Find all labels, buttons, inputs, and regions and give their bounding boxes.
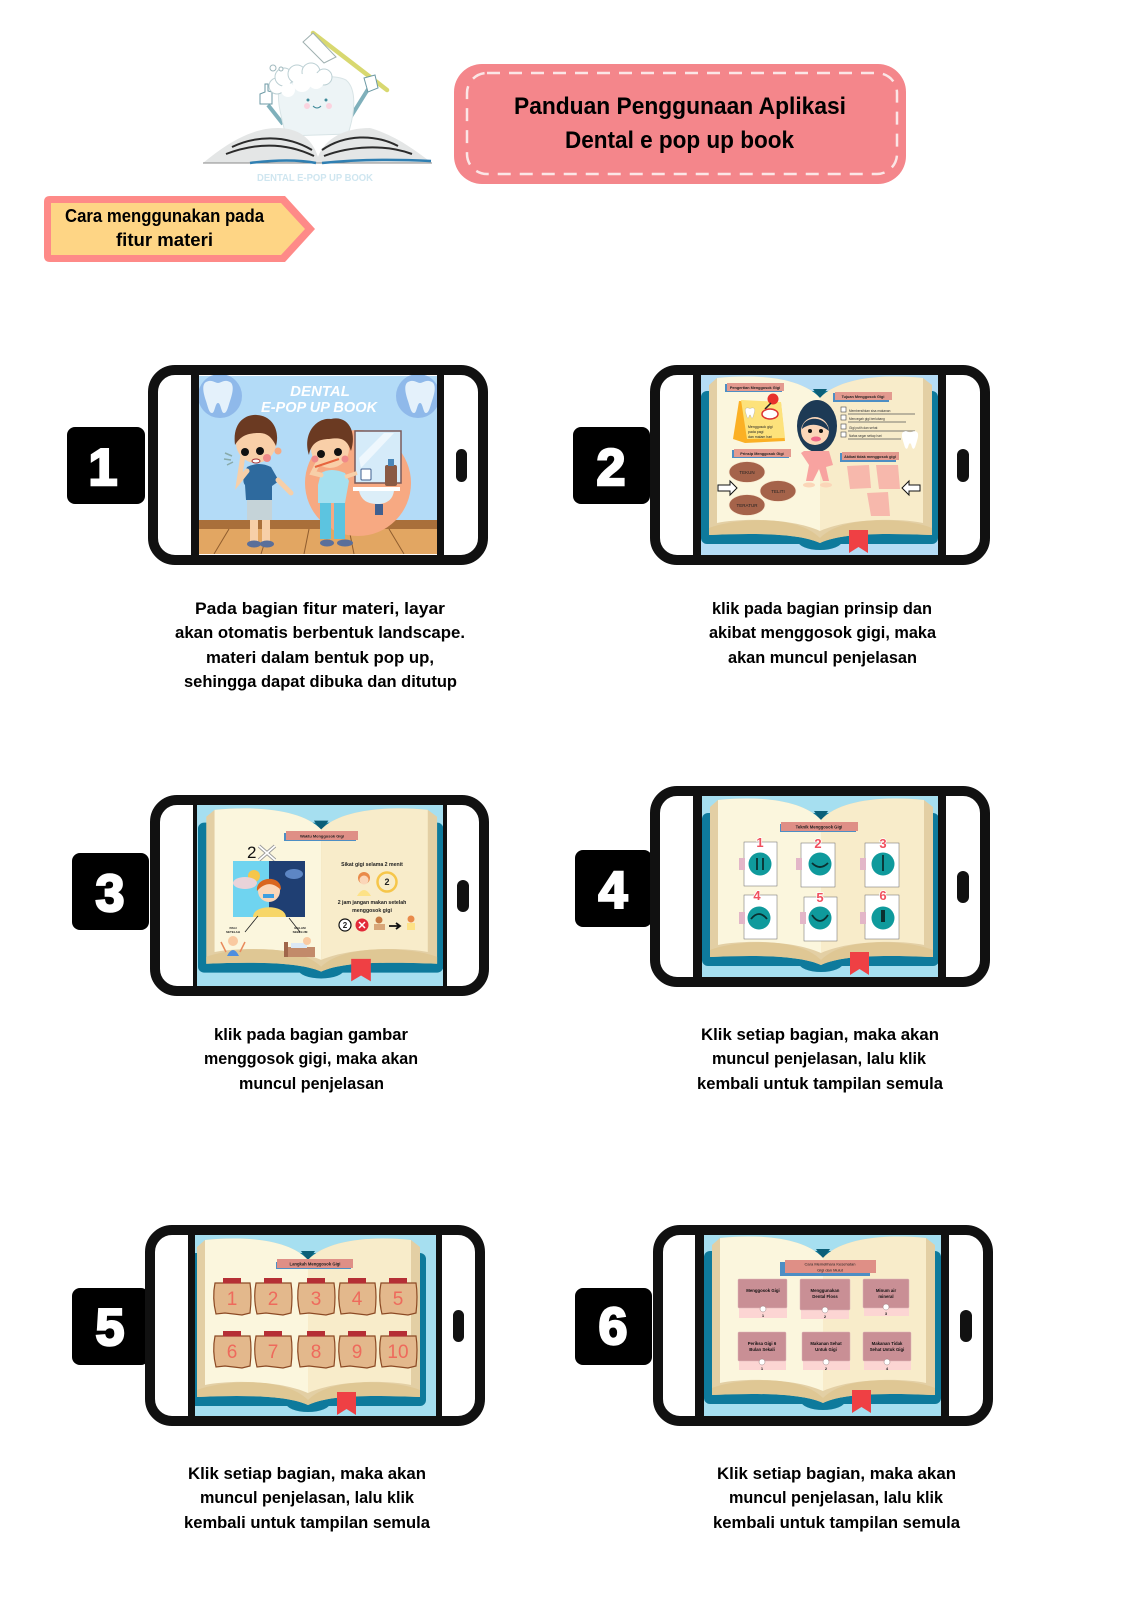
phone 6 screen: book page: mineral xyxy=(878,1294,894,1299)
ribbon text: Cara menggunakan pada xyxy=(65,206,265,226)
phone 4 screen: book page: 3 xyxy=(879,836,887,851)
caption 2: akibat menggosok gigi, maka xyxy=(709,624,937,642)
caption 1: akan otomatis berbentuk landscape. xyxy=(175,624,465,642)
phone 6 screen: book page: 4 xyxy=(886,1366,889,1371)
phone 3 screen: book page: Waktu Menggosok Gigi xyxy=(300,834,344,838)
caption 3: klik pada bagian gambar xyxy=(214,1026,409,1044)
phone 6 screen: book page: 2 xyxy=(825,1366,828,1371)
lower pink tabs xyxy=(739,1308,911,1370)
badge 2 xyxy=(573,427,650,504)
phone 2 screen: book page: Menggosok gigi xyxy=(748,425,773,429)
step 6 xyxy=(575,1225,988,1532)
phone 2 screen: book page: Mencegah gigi berlubang xyxy=(849,417,885,421)
icon: toothbrush xyxy=(303,33,387,90)
phone 2 screen: book page: dan malam hari xyxy=(748,435,772,439)
phone 6 screen: book page: Bulan Sekali xyxy=(749,1347,775,1352)
day and night brushing picture xyxy=(233,861,305,917)
phone 3 screen: book page: 2 xyxy=(247,843,256,862)
phone 2 screen: book page: Pengertian Menggosok Gigi xyxy=(730,386,780,390)
caption 5: Klik setiap bagian, maka akan xyxy=(188,1465,426,1483)
phone 2 screen: book page: Akibat tidak menggosok gigi xyxy=(844,455,896,459)
phone 3 screen: book page: SEBELUM xyxy=(293,930,308,934)
caption 5: muncul penjelasan, lalu klik xyxy=(200,1489,415,1507)
phone 2 frame xyxy=(655,365,985,565)
phone 4 screen: book page: 4 xyxy=(753,888,761,903)
ribbon text: fitur materi xyxy=(116,230,213,250)
phone 3 screen: book page xyxy=(197,805,443,986)
phone 6 screen: book page: 2 xyxy=(824,1314,827,1319)
step 5 xyxy=(72,1225,480,1532)
caption 3 xyxy=(204,1026,418,1093)
badge 3 xyxy=(72,853,149,930)
ribbon text xyxy=(65,206,265,250)
numbered folders row 1 xyxy=(214,1283,417,1315)
phone 6 screen: book page: Makanan Sehat xyxy=(810,1341,842,1346)
phone 1 screen: cover scene xyxy=(199,375,437,554)
phone 3 screen: book page: MALAM xyxy=(294,926,306,930)
phone 3 screen: book page: 2 jam jangan makan setelah xyxy=(338,900,406,906)
phone 5 screen: book page: 5 xyxy=(393,1289,403,1310)
caption 1: Pada bagian fitur materi, layar xyxy=(195,600,446,618)
phone 6 screen: book page: Untuk Gigi xyxy=(815,1347,837,1352)
phone 3 screen: book page: menggosok gigi xyxy=(352,908,392,914)
phone 6 frame xyxy=(658,1225,988,1426)
phone 6 screen: book page: Menggunakan xyxy=(811,1288,840,1293)
caption 2 xyxy=(709,600,937,667)
phone 1 frame xyxy=(153,365,483,565)
caption 4 xyxy=(697,1026,944,1093)
phone 6 screen: book page: 1 xyxy=(761,1366,764,1371)
phone 5 screen: book page: 8 xyxy=(311,1342,321,1363)
phone 6 screen: book page: Sehat Untuk Gigi xyxy=(870,1347,904,1352)
caption 3: muncul penjelasan xyxy=(239,1075,384,1093)
boy brushing teeth xyxy=(307,418,357,546)
phone 4 screen: book page: Teknik Menggosok Gigi xyxy=(796,824,842,830)
phone 2 screen: book page xyxy=(701,375,938,555)
step 1 xyxy=(67,365,483,691)
title text: Panduan Penggunaan Aplikasi xyxy=(514,93,846,120)
badge 2: 2 xyxy=(597,439,625,497)
phone 5 screen: book page: 3 xyxy=(311,1289,321,1310)
phone 6 screen: book page: Gigi dan Mulut xyxy=(817,1268,844,1272)
icon: tooth character xyxy=(260,63,378,136)
phone 2 screen: book page: Nafas segar setiap hari xyxy=(849,434,882,438)
caption 6: muncul penjelasan, lalu klik xyxy=(729,1489,944,1507)
phone 6 screen: book page: Menggosok Gigi xyxy=(746,1288,780,1293)
step 3 xyxy=(72,795,484,1093)
logo caption: DENTAL E-POP UP BOOK xyxy=(257,172,373,184)
phone 4 screen: book page: 5 xyxy=(816,890,824,905)
caption 4: Klik setiap bagian, maka akan xyxy=(701,1026,939,1044)
brushing technique cards xyxy=(744,842,899,941)
phone 4 screen: book page: 1 xyxy=(756,835,764,850)
phone 2 screen: book page: pada pagi xyxy=(748,430,764,434)
prinsip ovals: TELITI xyxy=(771,489,785,494)
care topic cards xyxy=(738,1279,911,1361)
phone 5 screen: book page: Langkah Menggosok Gigi xyxy=(290,1262,340,1266)
caption 5 xyxy=(184,1465,431,1532)
caption 1 xyxy=(175,600,465,691)
phone 6 screen: book page: Minum air xyxy=(876,1288,896,1293)
phone 4 screen: book page: 2 xyxy=(814,836,822,851)
phone 3 screen: book page: Sikat gigi selama 2 menit xyxy=(341,862,403,868)
phone 6 screen: book page: Dental Floss xyxy=(812,1294,838,1299)
phone 6 screen: book page: Makanan Tidak xyxy=(872,1341,903,1346)
phone 3 screen: book page: SETELAH xyxy=(226,930,240,934)
badge 5 xyxy=(72,1288,149,1365)
phone 5 screen: book page: 9 xyxy=(352,1342,362,1363)
phone 3 screen: book page: 2 xyxy=(384,877,390,887)
prinsip ovals: TEKUN xyxy=(739,470,755,475)
phone 5 screen: book page: 1 xyxy=(227,1289,237,1310)
logo: tooth on open book xyxy=(203,33,432,184)
ribbon: feature label xyxy=(44,196,315,262)
caption 6: Klik setiap bagian, maka akan xyxy=(717,1465,956,1483)
akibat notes xyxy=(847,465,900,516)
girl character xyxy=(797,400,837,488)
badge 3: 3 xyxy=(96,865,124,923)
phone 2 screen: book page: Prinsip Menggosok Gigi xyxy=(740,452,784,456)
prinsip ovals xyxy=(729,462,796,516)
caption 6 xyxy=(713,1465,961,1532)
phone 4 screen: book page: 6 xyxy=(879,888,887,903)
badge 4 xyxy=(575,850,652,927)
phone 5 screen: book page xyxy=(195,1235,436,1416)
phone 4 frame xyxy=(655,786,985,987)
caption 1: materi dalam bentuk pop up, xyxy=(206,649,434,667)
phone 6 screen: book page: 1 xyxy=(762,1313,765,1318)
title text: Dental e pop up book xyxy=(565,127,795,154)
phone 5 screen: book page: 6 xyxy=(227,1342,237,1363)
phone 3 screen: book page: PAGI xyxy=(229,926,237,930)
badge 6: 6 xyxy=(599,1298,627,1356)
phone 4 screen: book page xyxy=(702,796,938,977)
badge 1: 1 xyxy=(89,439,117,497)
phone 3 frame xyxy=(155,795,484,996)
badge 1 xyxy=(67,427,145,504)
prinsip ovals: TERATUR xyxy=(737,503,758,508)
badge 4: 4 xyxy=(599,862,628,920)
phone 5 screen: book page: 7 xyxy=(268,1342,278,1363)
phone 2 screen: book page: Membersihkan sisa makanan xyxy=(849,409,891,413)
caption 2: klik pada bagian prinsip dan xyxy=(712,600,932,618)
badge 5: 5 xyxy=(96,1299,124,1357)
step 2 xyxy=(573,365,985,667)
phone 3 screen: book page: 2 xyxy=(343,921,348,930)
step 4 xyxy=(575,786,985,1093)
title banner xyxy=(454,64,906,184)
phone 6 screen: book page xyxy=(704,1235,941,1416)
phone 5 screen: book page: 4 xyxy=(352,1289,363,1310)
phone 2 screen: book page: Gigi putih dan sehat xyxy=(849,426,877,430)
phone 1 screen: cover scene: E-POP UP BOOK xyxy=(261,399,378,416)
phone 5 frame xyxy=(150,1225,480,1426)
caption 3: menggosok gigi, maka akan xyxy=(204,1050,418,1068)
caption 4: muncul penjelasan, lalu klik xyxy=(712,1050,927,1068)
phone 6 screen: book page: 3 xyxy=(885,1311,888,1316)
caption 2: akan muncul penjelasan xyxy=(728,649,917,667)
badge 6 xyxy=(575,1288,652,1365)
caption 5: kembali untuk tampilan semula xyxy=(184,1514,431,1532)
phone 6 screen: book page: Periksa Gigi 6 xyxy=(748,1341,777,1346)
numbered folders row 2 xyxy=(214,1336,417,1368)
icon: open book xyxy=(203,128,432,163)
boy with toothache xyxy=(224,415,291,548)
phone 5 screen: book page: 10 xyxy=(387,1342,409,1363)
caption 1: sehingga dapat dibuka dan ditutup xyxy=(184,673,457,691)
title text xyxy=(514,93,846,154)
caption 4: kembali untuk tampilan semula xyxy=(697,1075,944,1093)
phone 1 screen: cover scene: DENTAL xyxy=(290,383,350,400)
phone 5 screen: book page: 2 xyxy=(268,1289,278,1310)
phone 6 screen: book page: Cara Memelihara Kesehatan xyxy=(805,1262,855,1266)
caption 6: kembali untuk tampilan semula xyxy=(713,1514,961,1532)
phone 2 screen: book page: Tujuan Menggosok Gigi xyxy=(842,395,884,399)
